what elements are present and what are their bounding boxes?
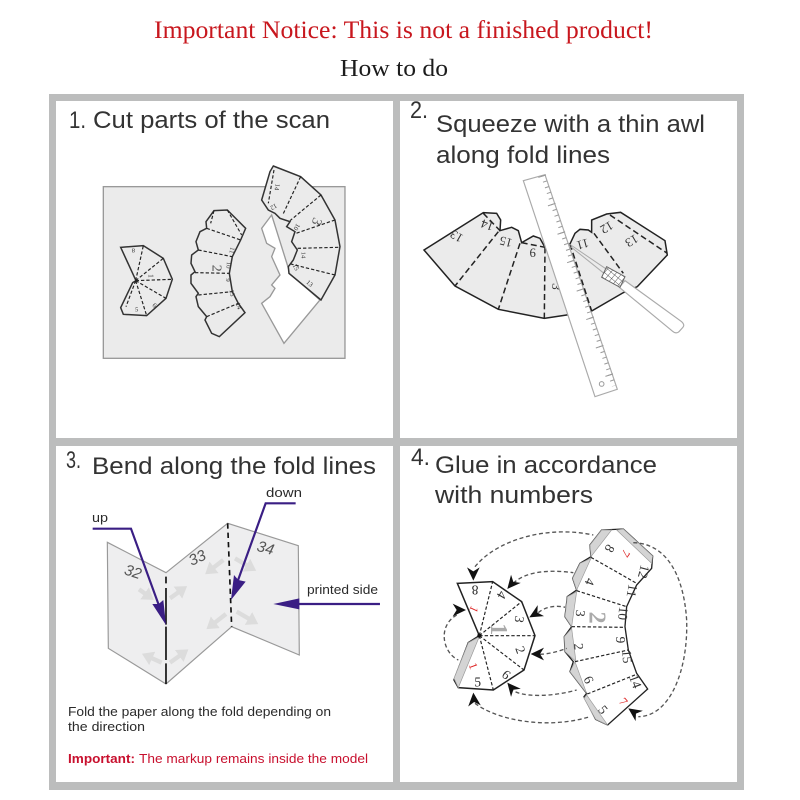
paper part: 15	[498, 233, 514, 250]
paper part: 11	[575, 236, 590, 252]
part 2: 4	[581, 576, 598, 588]
paper part: 13	[623, 231, 641, 250]
part 2: 7	[616, 695, 631, 708]
heading: step 4: with numbers	[434, 482, 593, 509]
label: down: down	[266, 485, 302, 500]
illustration: folded sheet	[93, 503, 380, 684]
part 2: 10	[224, 261, 232, 269]
part 2: 6	[581, 674, 597, 686]
part 2: 15	[619, 649, 635, 664]
part 3	[262, 166, 340, 300]
part 2: 2	[571, 643, 587, 651]
part 1	[121, 246, 172, 316]
gray direction arrows	[139, 558, 250, 663]
part 1: 1	[466, 604, 482, 615]
panel: step 3 bend	[56, 446, 393, 782]
ruler	[523, 175, 617, 397]
part 2: 9	[613, 637, 628, 644]
heading: step 4	[411, 444, 657, 509]
heading: step 1: Cut parts of the scan	[93, 107, 330, 134]
page numbers: 33	[186, 547, 209, 570]
part 1: 1	[147, 274, 156, 278]
dashed connectors	[444, 532, 687, 723]
part 1: 1	[466, 661, 481, 671]
heading: step 4: Glue in accordance	[435, 452, 657, 479]
paper part: 3	[549, 282, 564, 291]
text: important note: Important:	[68, 751, 135, 766]
heading: step 2	[410, 97, 705, 169]
part 2: 14	[234, 302, 243, 311]
panel: step 1 cut parts	[56, 101, 393, 438]
illustration: awl and ruler	[424, 175, 684, 397]
heading: step 3: Bend along the fold lines	[92, 453, 376, 480]
part 3: 13	[304, 279, 315, 289]
text: fold instruction	[68, 704, 331, 734]
folded paper	[107, 523, 299, 684]
part 2: 11	[624, 583, 641, 598]
text: fold instruction: Fold the paper along the fold depending on	[68, 704, 331, 719]
title: important notice: Important Notice: This is not a finished product!	[154, 15, 653, 44]
part 1: 2	[512, 644, 529, 656]
arrow: down	[231, 503, 296, 600]
heading: step 1: 1.	[69, 107, 86, 134]
part 1: 1	[485, 623, 511, 635]
part 1: 8	[471, 582, 478, 597]
page numbers: 32	[122, 562, 144, 583]
part 2: 15	[227, 289, 236, 298]
arrow: printed side	[273, 598, 380, 609]
subtitle: how to do: How to do	[340, 55, 448, 82]
part 1: 6	[499, 667, 514, 683]
heading: step 2: along fold lines	[436, 142, 610, 169]
heading: step 2: Squeeze with a thin awl	[436, 111, 705, 138]
paper part: 9	[529, 246, 536, 260]
illustration: glue diagram	[444, 529, 687, 725]
heading: step 3: 3.	[66, 447, 81, 474]
part 3: 14	[300, 252, 307, 259]
panel: step 2 squeeze	[400, 97, 737, 438]
text: important note: The markup remains inside the model	[139, 751, 368, 766]
part 2: 2	[209, 265, 224, 272]
panel: step 4 glue	[400, 444, 737, 782]
page numbers	[122, 538, 276, 583]
part 2	[191, 210, 246, 337]
heading: step 2: 2.	[410, 97, 428, 124]
part 2: 5	[595, 702, 611, 717]
grey frame	[49, 94, 744, 790]
part 3: 3	[308, 215, 324, 227]
part 2: 14	[626, 673, 645, 691]
label: printed side: printed side	[307, 582, 378, 597]
part 2	[564, 529, 653, 725]
part 2: 9	[224, 278, 231, 282]
text: fold instruction: the direction	[68, 719, 145, 734]
black arrowheads	[453, 567, 643, 721]
part 1: 8	[131, 246, 135, 253]
part 2: 3	[573, 609, 588, 618]
awl	[569, 244, 684, 333]
fold lines	[166, 523, 232, 684]
page numbers: 34	[255, 538, 276, 559]
part 3: 10	[291, 222, 301, 232]
part 1: 5	[135, 307, 139, 314]
paper part: 12	[598, 218, 616, 237]
paper part: 13	[448, 227, 466, 245]
part 2: 11	[227, 246, 235, 254]
part 1: 5	[474, 675, 481, 690]
part 2: 2	[583, 612, 609, 624]
part 2: 8	[601, 542, 618, 556]
part 3: 15	[291, 263, 300, 273]
part 3: 12	[269, 202, 278, 211]
illustration: scan sheet with cut parts	[103, 166, 345, 358]
part 1: 6	[151, 302, 158, 310]
part 2: 7	[618, 547, 633, 560]
part 2: 10	[615, 606, 631, 621]
part 1: 3	[511, 615, 527, 624]
paper part: 14	[478, 216, 496, 234]
paper part	[424, 212, 667, 318]
label: up: up	[92, 510, 108, 525]
part 1: 4	[493, 588, 510, 602]
part 3: 14	[272, 183, 280, 191]
heading: step 4: 4.	[411, 444, 430, 471]
part 2: 12	[635, 563, 653, 580]
arrow: up	[93, 529, 166, 625]
part 1	[454, 582, 535, 690]
